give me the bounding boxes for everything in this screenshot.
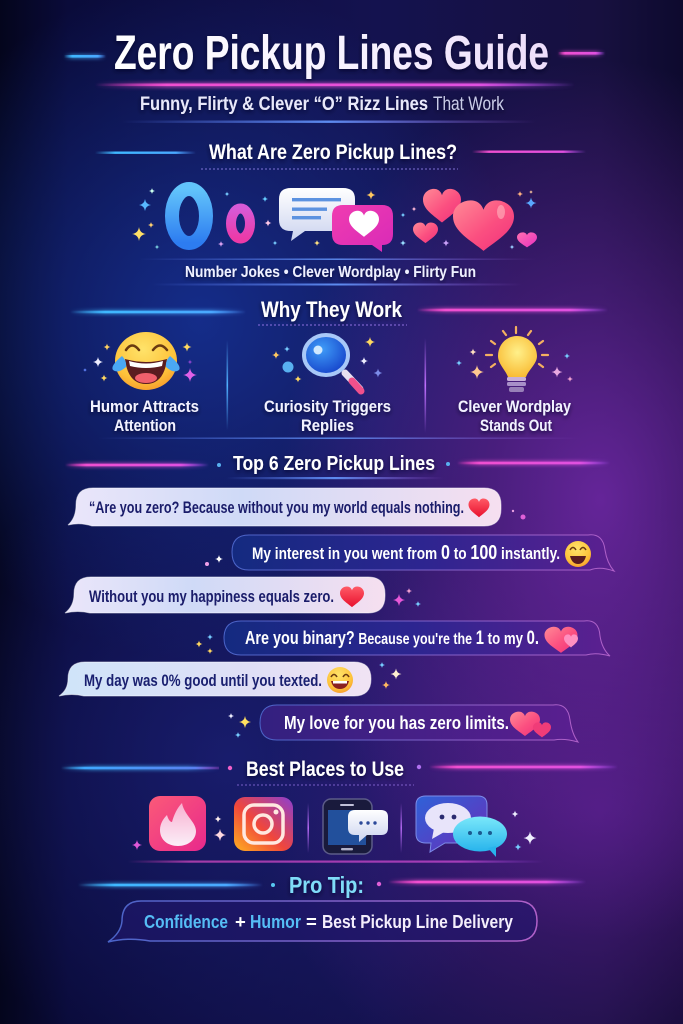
icon: phone xyxy=(323,799,388,854)
bubble 3 xyxy=(65,577,385,613)
icon: text chat bubble xyxy=(279,188,355,241)
divider line xyxy=(98,438,579,439)
heading: Top 6 Zero Pickup Lines xyxy=(233,452,435,475)
divider xyxy=(400,803,402,853)
icon: smiling emoji xyxy=(327,667,353,693)
panel: what are zero pickup lines xyxy=(95,141,586,286)
divider line xyxy=(128,860,544,863)
bubble 6: My love for you has zero limits. xyxy=(284,713,509,733)
label: curiosity: Replies xyxy=(301,417,354,435)
heading line right xyxy=(472,150,586,153)
sparkles bubble 6 xyxy=(228,713,251,738)
tip text: Best Pickup Line Delivery xyxy=(322,911,514,932)
sparkles around emoji xyxy=(83,342,197,382)
accent line: title left xyxy=(64,54,106,59)
heading line right xyxy=(457,460,610,466)
subtitle: Funny, Flirty & Clever “O” Rizz Lines xyxy=(140,93,428,115)
heading dots xyxy=(271,882,381,887)
bubble 1: “Are you zero? Because without you my world equals nothing. xyxy=(89,498,464,517)
icon: tinder xyxy=(149,796,206,851)
heading: What Are Zero Pickup Lines? xyxy=(209,141,457,164)
heading line left xyxy=(65,462,209,468)
title: Zero Pickup Lines Guide xyxy=(114,27,549,80)
heading line right xyxy=(388,880,586,884)
icon: red heart xyxy=(468,498,490,517)
label: wordplay xyxy=(458,398,572,435)
heading line left xyxy=(78,882,263,888)
heading dots xyxy=(228,765,421,770)
bubble 3: Without you my happiness equals zero. xyxy=(89,587,334,606)
label: humor xyxy=(90,398,199,435)
label: wordplay: Clever Wordplay xyxy=(458,398,572,416)
label: humor: Humor Attracts xyxy=(90,398,199,416)
icon: light bulb xyxy=(486,327,548,392)
label: curiosity xyxy=(264,398,391,435)
subtitle: That Work xyxy=(433,93,504,115)
subtitle underline xyxy=(122,120,536,123)
panel: best places to use xyxy=(61,757,618,863)
bubble 2 xyxy=(232,535,614,571)
icon: big zero xyxy=(172,189,206,243)
heading line right xyxy=(417,308,608,312)
heading: Pro Tip: xyxy=(289,872,364,898)
sparkles bubble 2 xyxy=(205,555,223,566)
bubble 2: My interest in you went from 0 to 100 instantly. xyxy=(252,542,560,564)
tip text xyxy=(144,911,514,932)
bubble 4: Are you binary? Because you're the 1 to my 0. xyxy=(245,627,539,649)
icon: hearts xyxy=(413,189,537,251)
accent line: title right xyxy=(558,51,605,56)
tip text: + xyxy=(235,911,246,932)
icon: double hearts xyxy=(544,627,578,653)
heading line left xyxy=(61,766,219,770)
tip text: = xyxy=(306,911,317,932)
panel: pro tip xyxy=(78,872,586,942)
heading: Why They Work xyxy=(261,297,403,322)
sparkles around bulb xyxy=(456,348,573,382)
heading underline xyxy=(226,477,444,479)
icon: instagram xyxy=(234,797,293,851)
divider xyxy=(424,338,426,433)
heading: Best Places to Use xyxy=(246,757,404,781)
caption: Number Jokes • Clever Wordplay • Flirty Fun xyxy=(185,264,476,281)
label: curiosity: Curiosity Triggers xyxy=(264,398,391,416)
tip text: Confidence xyxy=(144,911,228,932)
bubble 5 xyxy=(59,662,371,696)
bubble 5: My day was 0% good until you texted. xyxy=(84,671,322,690)
sparkles xyxy=(132,188,536,250)
dotted underline xyxy=(201,168,458,170)
icon: pink heart bubble xyxy=(332,205,393,252)
icon: red heart xyxy=(340,587,364,607)
dotted underline xyxy=(258,324,407,326)
heading line left xyxy=(95,152,196,154)
icon: small zero xyxy=(231,208,250,238)
title underline xyxy=(95,82,575,88)
icon: double hearts xyxy=(510,712,551,737)
panel: why they work xyxy=(70,297,608,439)
dotted underline xyxy=(237,784,414,786)
sparkles bubble 1 xyxy=(512,510,526,520)
heading line right xyxy=(429,764,618,770)
divider xyxy=(308,803,309,853)
divider line xyxy=(152,284,523,286)
icon: laughing emoji xyxy=(112,332,180,390)
bubble 6 xyxy=(260,705,578,742)
icon: magnifying glass xyxy=(304,335,361,391)
divider line xyxy=(139,258,536,260)
sparkles around app icons xyxy=(132,810,536,850)
panel: top 6 zero pickup lines xyxy=(59,452,614,742)
sparkles bubble 5 xyxy=(379,662,402,689)
tip text: Humor xyxy=(250,911,301,932)
bubble 4 xyxy=(224,621,610,656)
bubble 1 xyxy=(68,488,501,526)
icon: laughing emoji xyxy=(565,541,591,567)
label: wordplay: Stands Out xyxy=(480,417,552,435)
heading line left xyxy=(70,310,246,314)
tip bubble xyxy=(108,901,537,942)
icon: chat apps xyxy=(416,796,507,857)
label: humor: Attention xyxy=(114,417,176,435)
sparkles bubble 4 xyxy=(196,634,213,654)
title block xyxy=(64,27,605,123)
sparkles around magnifier xyxy=(272,337,382,382)
divider xyxy=(226,340,228,430)
sparkles bubble 3 xyxy=(393,588,421,607)
heading dots xyxy=(217,462,450,467)
